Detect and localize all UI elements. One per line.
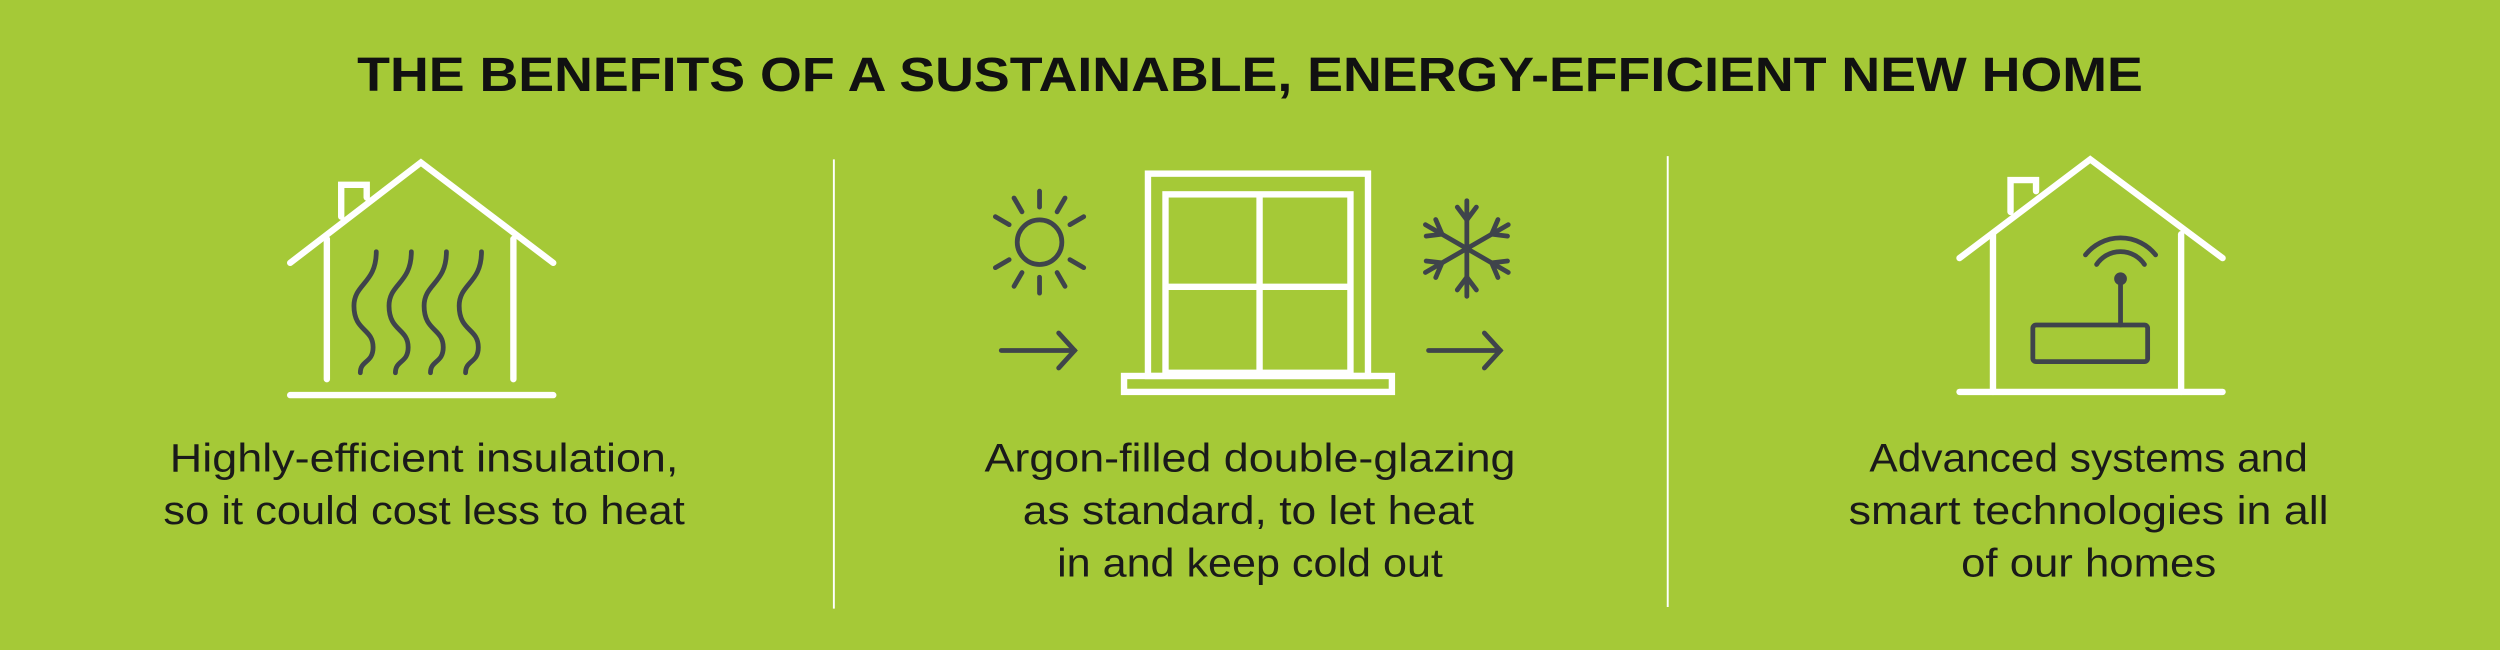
icon: window [1124, 174, 1392, 392]
panel: insulation [163, 162, 685, 533]
text: insulation: Highly-efficient insulation, [170, 437, 678, 481]
panel: smart tech: smart technologies in all [1849, 489, 2329, 533]
icon: sun [995, 191, 1084, 293]
panel: smart tech: of our homes [1961, 542, 2216, 586]
panel: glazing: in and keep cold out [1057, 542, 1443, 586]
text: glazing: Argon-filled double-glazing [985, 437, 1515, 481]
panel: smart tech [1849, 159, 2329, 586]
arrow: in [1001, 333, 1075, 368]
panel: insulation: so it could cost less to heat [163, 489, 685, 533]
title: THE BENEFITS OF A SUSTAINABLE, ENERGY-EFFICIENT NEW HOME [357, 49, 2143, 102]
panel: glazing [985, 174, 1515, 586]
icon: snowflake [1421, 201, 1513, 296]
icon: house with router [1960, 159, 2223, 392]
text: smart tech: Advanced systems and [1869, 437, 2308, 481]
panel: glazing: as standard, to let heat [1023, 489, 1474, 533]
arrow: out [1429, 333, 1500, 368]
icon: house with heat waves [290, 162, 553, 395]
